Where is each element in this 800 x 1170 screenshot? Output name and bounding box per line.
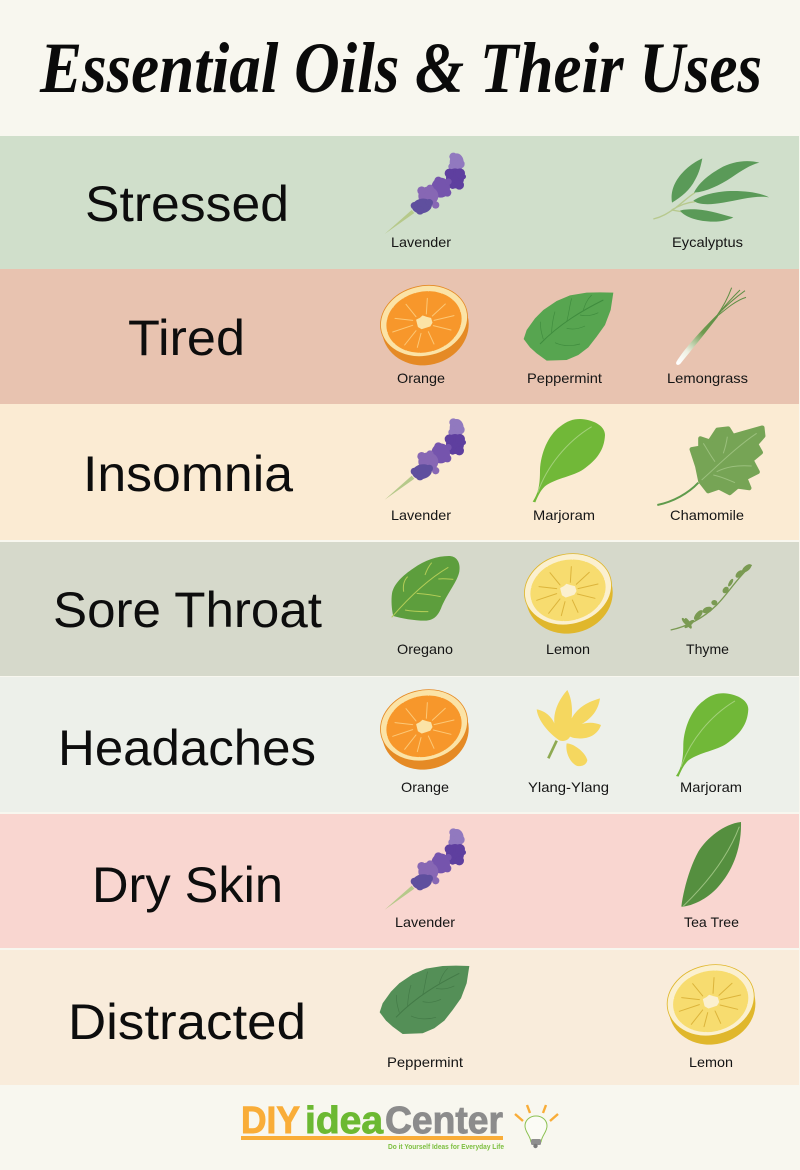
- label: marjoram: Marjoram: [680, 779, 742, 795]
- heading: sore throat: Sore Throat: [53, 582, 322, 638]
- label: lavender: Lavender: [395, 914, 455, 930]
- icon: chamomile: [657, 428, 763, 505]
- panel: insomnia: [0, 404, 799, 540]
- heading: insomnia: Insomnia: [83, 446, 293, 502]
- label: tea tree: Tea Tree: [684, 914, 739, 930]
- icon: lemongrass: [676, 288, 746, 365]
- label: marjoram: Marjoram: [533, 507, 595, 523]
- label: ylang-ylang: Ylang-Ylang: [528, 779, 609, 795]
- icon: thyme: [671, 563, 753, 630]
- icon: eucalyptus: [653, 158, 769, 222]
- icon: lavender: [385, 828, 466, 910]
- label: peppermint: Peppermint: [387, 1054, 463, 1070]
- label: orange: Orange: [397, 370, 445, 386]
- icon: ylang-ylang: [537, 690, 601, 766]
- logo: DIY idea center: [241, 1100, 558, 1151]
- panel: dry skin: [0, 814, 799, 948]
- label: orange: Orange: [401, 779, 449, 795]
- icon: orange: [373, 681, 477, 779]
- label: lemongrass: Lemongrass: [667, 370, 748, 386]
- heading: stressed: Stressed: [85, 176, 289, 232]
- label: lemon: Lemon: [546, 641, 590, 657]
- panel: distracted: [0, 950, 799, 1085]
- icon: tea tree: [681, 822, 741, 907]
- panel: headaches: [0, 677, 799, 812]
- label: thyme: Thyme: [686, 641, 729, 657]
- logo tagline: Do it Yourself Ideas for Everyday Life: [388, 1142, 504, 1151]
- icon: marjoram: [533, 419, 605, 502]
- icon: lavender: [385, 153, 466, 234]
- label: lavender: Lavender: [391, 507, 451, 523]
- label: peppermint: Peppermint: [527, 370, 602, 386]
- icon: peppermint: [524, 292, 613, 361]
- logo wordmark: DIY: [241, 1100, 300, 1142]
- logo wordmark: Center: [385, 1100, 503, 1142]
- logo underline: [241, 1136, 503, 1140]
- heading: distracted: Distracted: [68, 994, 306, 1050]
- label: chamomile: Chamomile: [670, 507, 744, 523]
- heading: headaches: Headaches: [58, 720, 316, 776]
- icon: light bulb: [515, 1105, 558, 1148]
- icon: oregano: [392, 556, 460, 621]
- panel: stressed: [0, 136, 799, 269]
- heading: dry skin: Dry Skin: [92, 857, 283, 913]
- label: lemon: Lemon: [689, 1054, 733, 1070]
- icon: orange: [373, 276, 477, 374]
- label: eucalyptus: Eycalyptus: [672, 234, 743, 250]
- panel: sore throat: [0, 542, 799, 676]
- icon: peppermint: [380, 966, 469, 1034]
- icon: lemon: [660, 956, 764, 1054]
- label: oregano: Oregano: [397, 641, 453, 657]
- label: lavender: Lavender: [391, 234, 451, 250]
- icon: lemon: [517, 545, 621, 643]
- logo wordmark: idea: [305, 1100, 384, 1142]
- heading: tired: Tired: [128, 310, 245, 366]
- panel: tired: [0, 269, 799, 404]
- icon: lavender: [385, 418, 466, 500]
- icon: marjoram: [676, 693, 748, 777]
